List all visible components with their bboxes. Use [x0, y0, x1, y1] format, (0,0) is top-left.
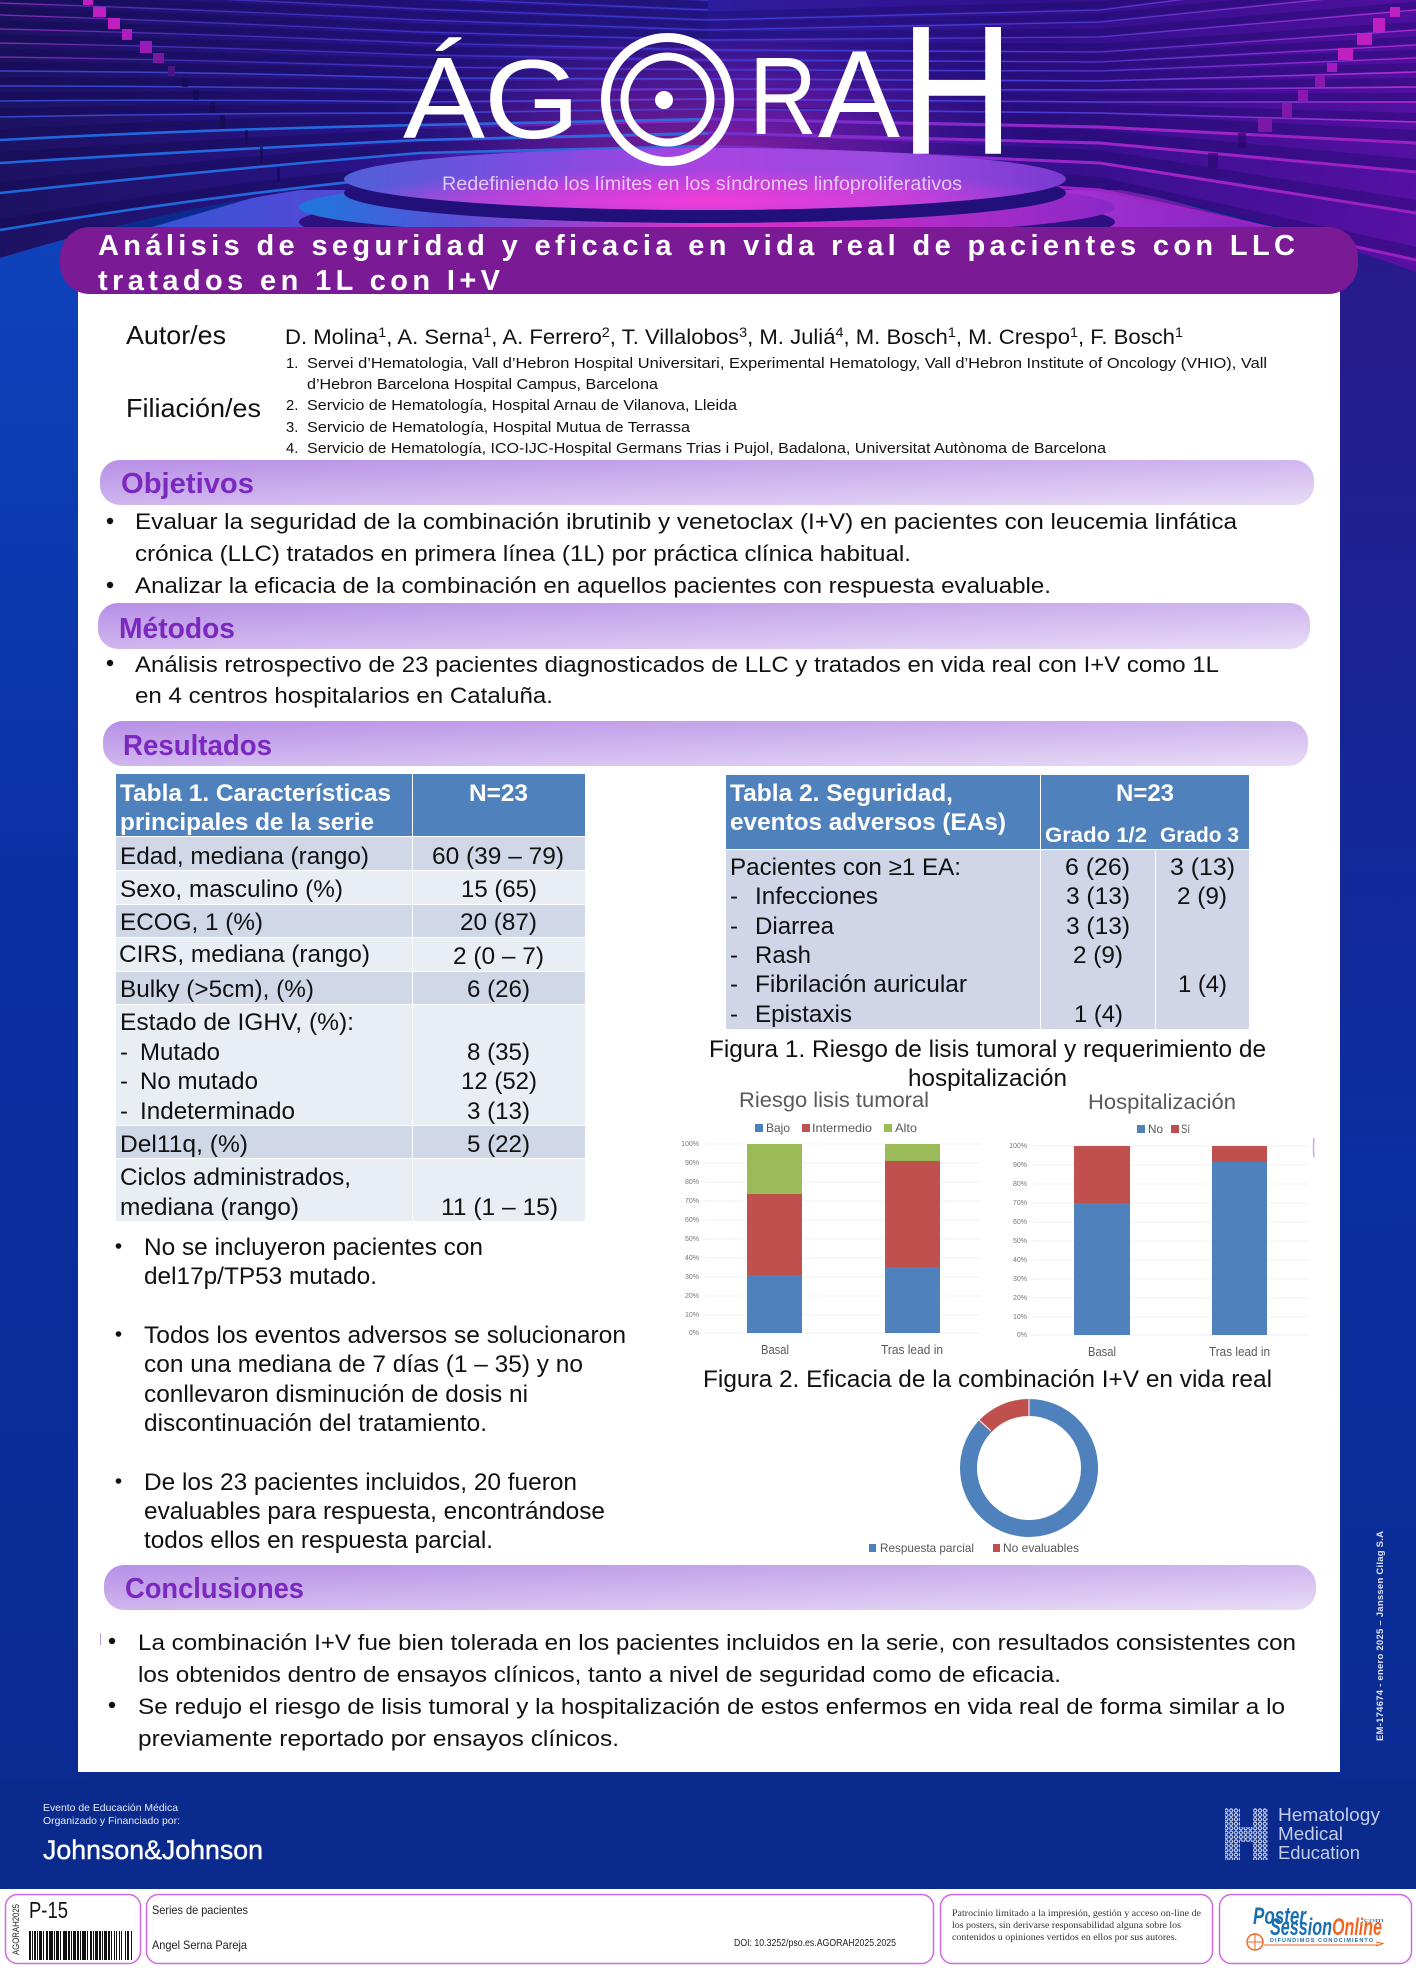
table 2: safety: 3 (13)	[1170, 854, 1235, 881]
authors block: Autor/es	[126, 320, 226, 350]
figure 1 caption: hospitalización	[908, 1065, 1067, 1092]
chart: hospitalización: Sí	[1181, 1122, 1191, 1136]
table 2: safety: Fibrilación auricular	[755, 971, 967, 998]
chart: hospitalización: 70%	[1013, 1200, 1027, 1207]
conclusiones text: La combinación I+V fue bien tolerada en los pacientes incluidos en la serie, con resultados consistentes con	[138, 1630, 1296, 1655]
conclusiones text: previamente reportado por ensayos clínicos.	[138, 1726, 619, 1751]
heading: Métodos: Métodos	[119, 613, 235, 645]
metodos text: Análisis retrospectivo de 23 pacientes diagnosticados de LLC y tratados en vida real con I+V como 1L	[135, 652, 1219, 677]
authors block: d’Hebron Barcelona Hospital Campus, Barcelona	[307, 377, 659, 393]
results notes: con una mediana de 7 días (1 – 35) y no	[144, 1351, 583, 1378]
table 2: safety: -	[730, 942, 738, 969]
authors block: , M. Crespo	[956, 325, 1070, 349]
chart: riesgo lisis tumoral: Tras lead in	[881, 1343, 943, 1357]
authors block: 4.	[286, 441, 298, 457]
heading: Métodos	[98, 603, 1310, 649]
objetivos text: Analizar la eficacia de la combinación en aquellos pacientes con respuesta evaluable.	[135, 573, 1051, 598]
table 1: main characteristics: 11 (1 – 15)	[441, 1194, 558, 1221]
table 1: main characteristics: -	[120, 1068, 128, 1095]
chart: riesgo lisis tumoral: 50%	[685, 1236, 699, 1243]
objetivos text	[107, 509, 1238, 598]
heading: Conclusiones: Conclusiones	[125, 1573, 304, 1605]
table 1: main characteristics: -	[120, 1039, 128, 1066]
objetivos text: crónica (LLC) tratados en primera línea (1L) por práctica clínica habitual.	[135, 541, 911, 566]
table 1: main characteristics: Edad, mediana (rango)	[120, 843, 369, 870]
chart: riesgo lisis tumoral: Intermedio	[812, 1121, 872, 1135]
vertical code: EM-174674 - enero 2025 – Janssen Cilag S.A	[1375, 1531, 1386, 1741]
donut chart: respuesta: Respuesta parcial	[880, 1541, 974, 1555]
sponsor text and logo	[43, 1802, 263, 1865]
table 1: main characteristics: Mutado	[140, 1039, 220, 1066]
authors block: 1	[1070, 324, 1078, 340]
authors block: 4	[836, 324, 844, 340]
footer box: PosterSessionOnline logo	[1220, 1894, 1412, 1964]
table 1: main characteristics: Sexo, masculino (%)	[120, 876, 343, 903]
table 2: safety: Tabla 2. Seguridad,	[730, 780, 953, 807]
chart: hospitalización: 10%	[1013, 1314, 1027, 1321]
heading: Resultados	[103, 721, 1308, 766]
chart: riesgo lisis tumoral: 30%	[685, 1274, 699, 1281]
table 2: safety: 1 (4)	[1178, 971, 1227, 998]
footer box: sponsorship note: los posters, sin derivarse responsabilidad alguna sobre los	[952, 1920, 1181, 1931]
footer box: poster code and barcode: P-15	[29, 1897, 68, 1923]
footer box: PosterSessionOnline logo: Online	[1332, 1914, 1382, 1941]
chart: hospitalización: 20%	[1013, 1295, 1027, 1302]
table 2: safety: Rash	[755, 942, 811, 969]
sponsor text and logo: Organizado y Financiado por:	[43, 1815, 180, 1827]
table 1: main characteristics: Ciclos administrados,	[120, 1164, 351, 1191]
chart: hospitalización: 60%	[1013, 1219, 1027, 1226]
Hematology Medical Education logo: Education	[1278, 1843, 1360, 1863]
figure 1 caption: Figura 1. Riesgo de lisis tumoral y requerimiento de	[709, 1036, 1266, 1063]
title banner	[60, 227, 1358, 297]
footer box: category and author: Angel Serna Pareja	[152, 1938, 247, 1952]
table 2: safety: Grado 3	[1160, 824, 1239, 847]
authors block: , M. Juliá	[747, 325, 836, 349]
table 1: main characteristics: Del11q, (%)	[120, 1131, 248, 1158]
footer box: poster code and barcode	[6, 1894, 140, 1964]
chart: hospitalización: 40%	[1013, 1257, 1027, 1264]
authors block: Servicio de Hematología, Hospital Mutua de Terrassa	[307, 420, 691, 436]
conclusiones text	[100, 1630, 1296, 1751]
table 1: main characteristics: N=23	[469, 780, 528, 807]
table 2: safety: 3 (13)	[1066, 883, 1130, 910]
figure 2 caption: Figura 2. Eficacia de la combinación I+V en vida real	[703, 1366, 1272, 1393]
table 2: safety: -	[730, 971, 738, 998]
heading: Objetivos: Objetivos	[121, 468, 254, 500]
heading: Conclusiones	[104, 1565, 1316, 1610]
footer box: category and author	[146, 1894, 934, 1964]
conclusiones text: Se redujo el riesgo de lisis tumoral y la hospitalización de estos enfermos en vida real de forma similar a lo	[138, 1694, 1285, 1719]
Hematology Medical Education logo: Hematology	[1278, 1805, 1380, 1825]
donut chart: respuesta	[869, 1399, 1090, 1555]
white content panel	[78, 280, 1340, 1772]
table 1: main characteristics: Tabla 1. Características	[120, 780, 391, 807]
chart: riesgo lisis tumoral	[681, 1089, 981, 1357]
footer box: PosterSessionOnline logo: .com	[1361, 1918, 1385, 1924]
footer box: sponsorship note: Patrocinio limitado a la impresión, gestión y acceso on-line de	[952, 1908, 1202, 1919]
conclusiones text: los obtenidos dentro de ensayos clínicos, tanto a nivel de seguridad como de eficacia.	[138, 1662, 1061, 1687]
chart: riesgo lisis tumoral: 90%	[685, 1160, 699, 1167]
authors block: Filiación/es	[126, 393, 261, 423]
chart: riesgo lisis tumoral: 20%	[685, 1293, 699, 1300]
Hematology Medical Education logo	[1225, 1805, 1380, 1863]
footer box: PosterSessionOnline logo: DIFUNDIMOS CONOCIMIENTO	[1270, 1938, 1374, 1944]
table 2: safety: Infecciones	[755, 883, 878, 910]
table 2: safety: eventos adversos (EAs)	[730, 809, 1006, 836]
authors block: 3.	[286, 420, 298, 436]
chart: hospitalización: No	[1148, 1122, 1163, 1136]
title banner: tratados en 1L con I+V	[98, 265, 501, 297]
authors block: , A. Ferrero	[491, 325, 602, 349]
Hematology Medical Education logo: Medical	[1278, 1824, 1343, 1844]
title banner: Análisis de seguridad y eficacia en vida real de pacientes con LLC	[98, 230, 1295, 262]
chart: riesgo lisis tumoral: 60%	[685, 1217, 699, 1224]
table 1: main characteristics: 2 (0 – 7)	[453, 943, 544, 970]
chart: hospitalización: 80%	[1013, 1181, 1027, 1188]
results notes: De los 23 pacientes incluidos, 20 fueron	[144, 1469, 577, 1496]
stage platform	[236, 148, 1228, 320]
authors block: Servicio de Hematología, ICO-IJC-Hospital Germans Trias i Pujol, Badalona, Universitat Autònoma de Barcelona	[307, 441, 1107, 457]
results notes: todos ellos en respuesta parcial.	[144, 1527, 493, 1554]
logo tagline: Redefiniendo los límites en los síndromes linfoproliferativos	[442, 174, 962, 195]
metodos text: en 4 centros hospitalarios en Cataluña.	[135, 683, 553, 708]
results notes: evaluables para respuesta, encontrándose	[144, 1498, 605, 1525]
authors block: 1	[1175, 324, 1183, 340]
chart: riesgo lisis tumoral: Bajo	[766, 1121, 790, 1135]
authors block: 2	[602, 324, 610, 340]
chart: riesgo lisis tumoral: 100%	[681, 1141, 699, 1148]
authors block: 1.	[286, 356, 298, 372]
table 2: safety	[726, 775, 1249, 1029]
authors block: , M. Bosch	[844, 325, 948, 349]
chart: riesgo lisis tumoral: 70%	[685, 1198, 699, 1205]
chart: riesgo lisis tumoral: 10%	[685, 1312, 699, 1319]
footer strip	[0, 1889, 1416, 1968]
table 2: safety: N=23	[1116, 780, 1174, 807]
heading: Objetivos	[100, 460, 1314, 505]
footer box: poster code and barcode: AGORAH2025	[11, 1904, 22, 1955]
logo: ÁGORAH: A	[818, 26, 900, 164]
chart: riesgo lisis tumoral: Riesgo lisis tumoral	[739, 1089, 929, 1112]
figure 1 caption	[709, 1036, 1266, 1092]
results notes: discontinuación del tratamiento.	[144, 1410, 487, 1437]
table 1: main characteristics: principales de la serie	[120, 809, 374, 836]
results notes: Todos los eventos adversos se solucionaron	[144, 1322, 626, 1349]
table 1: main characteristics: 15 (65)	[461, 876, 537, 903]
footer box: category and author: Series de pacientes	[152, 1903, 248, 1917]
table 2: safety: 2 (9)	[1073, 942, 1123, 969]
footer box: PosterSessionOnline logo: Poster	[1253, 1903, 1307, 1930]
table 1: main characteristics: ECOG, 1 (%)	[120, 909, 263, 936]
table 1: main characteristics: 5 (22)	[467, 1131, 530, 1158]
authors block	[126, 320, 1267, 457]
table 1: main characteristics: Indeterminado	[140, 1098, 295, 1125]
authors block: Servicio de Hematología, Hospital Arnau de Vilanova, Lleida	[307, 398, 738, 414]
table 1: main characteristics: Estado de IGHV, (%):	[120, 1009, 354, 1036]
sponsor text and logo: Evento de Educación Médica	[43, 1802, 178, 1814]
table 1: main characteristics: 60 (39 – 79)	[432, 843, 564, 870]
authors block: D. Molina	[285, 325, 376, 349]
chart: hospitalización: 30%	[1013, 1276, 1027, 1283]
footer box: category and author: DOI: 10.3252/pso.es.AGORAH2025.2025	[734, 1937, 896, 1949]
chart: riesgo lisis tumoral: 80%	[685, 1179, 699, 1186]
authors block: , F. Bosch	[1078, 325, 1175, 349]
table 2: safety: Pacientes con ≥1 EA:	[730, 854, 961, 881]
authors block: 2.	[286, 398, 298, 414]
chart: hospitalización: 0%	[1017, 1332, 1027, 1339]
table 1: main characteristics: CIRS, mediana (rango)	[119, 941, 370, 968]
table 2: safety: -	[730, 913, 738, 940]
authors block: 1	[483, 324, 492, 340]
authors block: 1	[378, 324, 387, 340]
table 1: main characteristics: 8 (35)	[467, 1039, 530, 1066]
metodos text	[107, 652, 1219, 708]
table 1: main characteristics: 3 (13)	[467, 1098, 530, 1125]
table 1: main characteristics: -	[120, 1098, 128, 1125]
logo: ÁGORAH	[403, 0, 1013, 192]
chart: riesgo lisis tumoral: 40%	[685, 1255, 699, 1262]
logo: ÁGORAH: Á	[403, 33, 486, 163]
table 2: safety: Grado 1/2	[1045, 824, 1147, 847]
table 2: safety: Epistaxis	[755, 1001, 852, 1028]
chart: hospitalización: Hospitalización	[1088, 1091, 1236, 1114]
chart: hospitalización: Tras lead in	[1209, 1345, 1270, 1359]
sponsor text and logo: Johnson&Johnson	[43, 1835, 263, 1865]
chart: riesgo lisis tumoral: Alto	[895, 1121, 917, 1135]
chart: riesgo lisis tumoral: 0%	[689, 1330, 699, 1337]
chart: hospitalización: 90%	[1013, 1162, 1027, 1169]
footer box: PosterSessionOnline logo: Session	[1270, 1914, 1332, 1941]
table 1: main characteristics	[116, 774, 585, 1221]
logo: ÁGORAH: R	[749, 35, 817, 158]
table 1: main characteristics: mediana (rango)	[120, 1194, 299, 1221]
authors block: , T. Villalobos	[610, 325, 739, 349]
table 2: safety: 3 (13)	[1066, 913, 1130, 940]
table 2: safety: -	[730, 883, 738, 910]
results notes: del17p/TP53 mutado.	[144, 1263, 377, 1290]
chart: hospitalización	[1009, 1091, 1314, 1359]
chart: riesgo lisis tumoral: Basal	[761, 1343, 789, 1357]
table 1: main characteristics: 20 (87)	[460, 909, 537, 936]
table 1: main characteristics: No mutado	[140, 1068, 258, 1095]
results notes: No se incluyeron pacientes con	[144, 1234, 483, 1261]
table 1: main characteristics: Bulky (>5cm), (%)	[120, 976, 314, 1003]
footer box: sponsorship note: contenidos u opiniones vertidos en ellos por sus autores.	[952, 1932, 1177, 1943]
table 2: safety: -	[730, 1001, 738, 1028]
table 2: safety: Diarrea	[755, 913, 835, 940]
chart: hospitalización: 50%	[1013, 1238, 1027, 1245]
heading: Resultados: Resultados	[123, 730, 272, 762]
logo: ÁGORAH: G	[484, 37, 580, 162]
table 2: safety: 2 (9)	[1177, 883, 1227, 910]
chart: hospitalización: 100%	[1009, 1143, 1027, 1150]
authors block: 3	[739, 324, 747, 340]
chart: hospitalización: Basal	[1088, 1345, 1116, 1359]
table 1: main characteristics: 6 (26)	[467, 976, 530, 1003]
table 2: safety: 6 (26)	[1065, 854, 1130, 881]
donut chart: respuesta: No evaluables	[1003, 1541, 1079, 1555]
table 1: main characteristics: 12 (52)	[461, 1068, 537, 1095]
table 2: safety: 1 (4)	[1074, 1001, 1123, 1028]
authors block: Servei d’Hematologia, Vall d’Hebron Hospital Universitari, Experimental Hematology, Vall d’Hebron Institute of Oncology (VHIO), Vall	[307, 356, 1267, 372]
results notes: conllevaron disminución de dosis ni	[144, 1381, 528, 1408]
footer box: sponsorship note	[940, 1894, 1212, 1964]
results notes	[116, 1234, 626, 1554]
objetivos text: Evaluar la seguridad de la combinación ibrutinib y venetoclax (I+V) en pacientes con leucemia linfática	[135, 509, 1238, 534]
authors block: , A. Serna	[386, 325, 483, 349]
authors block: 1	[948, 324, 956, 340]
